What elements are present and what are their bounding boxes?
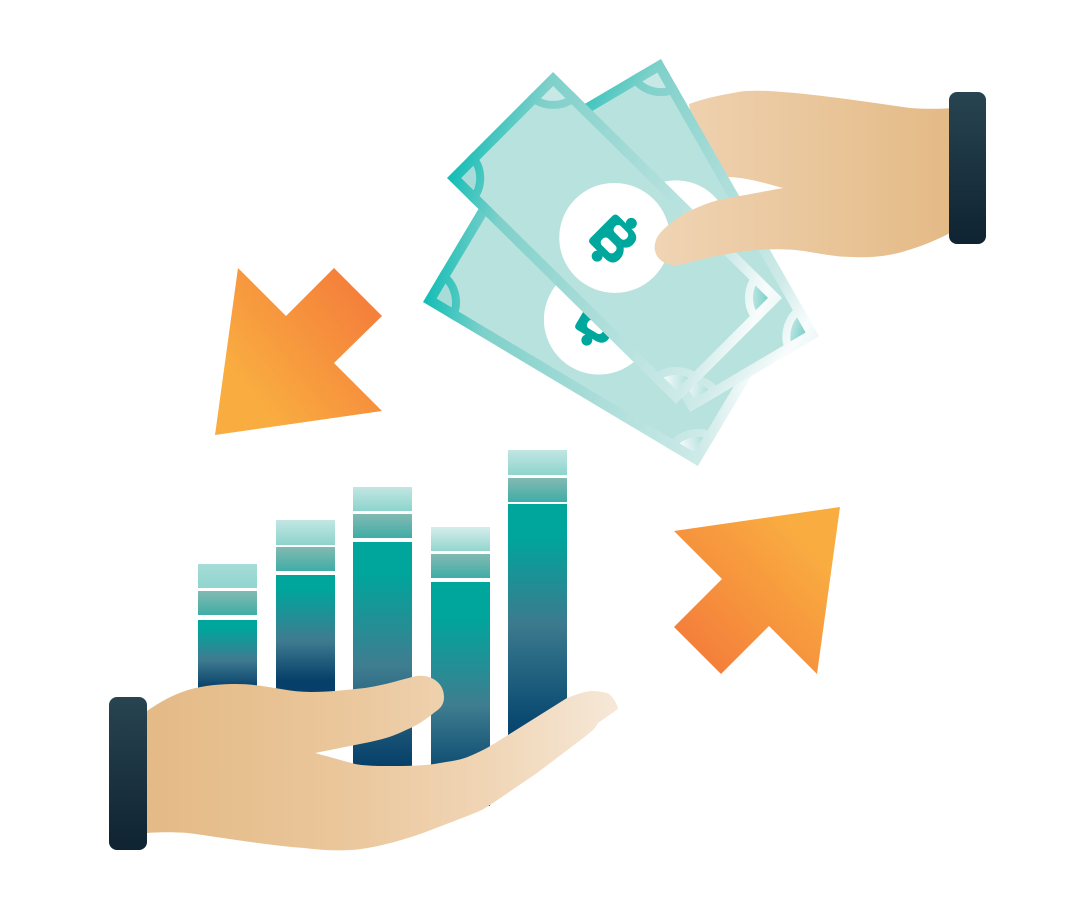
bar 5 <box>508 450 567 744</box>
bar chart <box>198 450 567 806</box>
top cuff <box>949 92 986 244</box>
bottom hand <box>147 676 618 850</box>
top hand: finger over notes <box>655 170 952 265</box>
bar 4 <box>431 527 490 806</box>
bottom cuff <box>109 697 147 850</box>
top hand: back of hand behind notes <box>689 91 952 232</box>
note: back <box>423 209 751 466</box>
bar 2 <box>276 520 335 695</box>
bar 1 <box>198 564 257 692</box>
note: front <box>447 72 782 404</box>
bar 3 <box>353 487 412 766</box>
icon: bitcoin symbol <box>569 286 629 354</box>
arrow: up-right orange <box>674 507 840 674</box>
illustration: hands exchanging bitcoin notes and a bar chart <box>109 59 986 850</box>
icon: bitcoin symbol <box>581 206 647 273</box>
arrow: down-left orange <box>215 268 382 435</box>
note: middle <box>585 59 819 412</box>
